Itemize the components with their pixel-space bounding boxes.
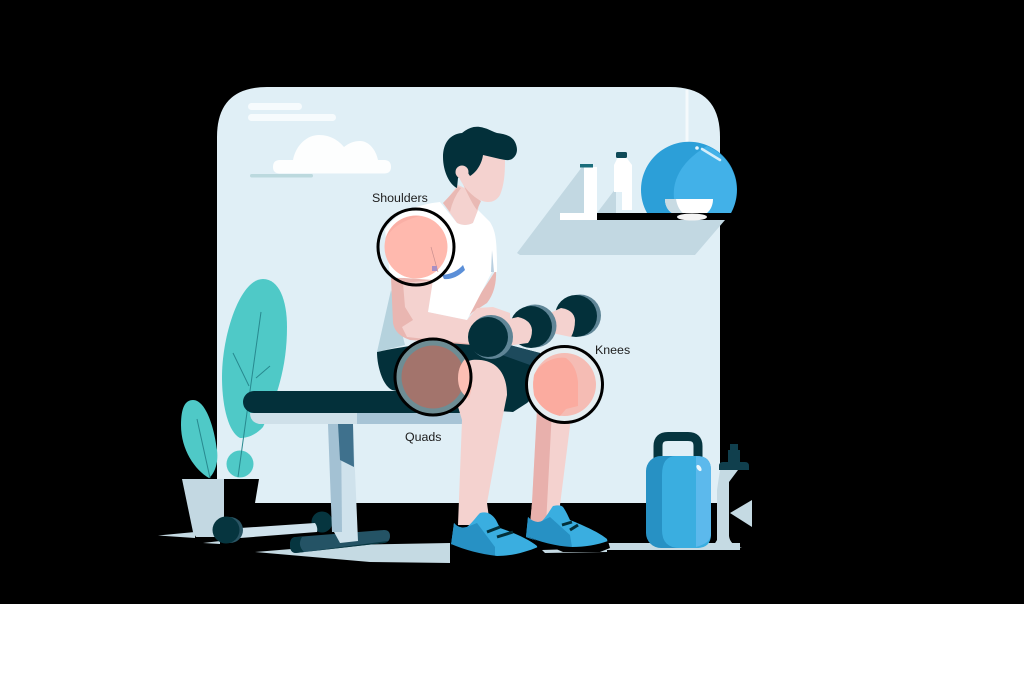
hanging rope	[686, 90, 688, 142]
far arm	[462, 270, 496, 322]
floor dumbbell	[212, 512, 332, 544]
label: Quads: Quads	[405, 430, 442, 444]
ear	[456, 166, 468, 178]
t-shirt	[385, 202, 497, 320]
bench underside	[250, 413, 465, 424]
person	[377, 127, 610, 561]
shelf board	[560, 213, 725, 220]
large leaf	[222, 279, 287, 438]
far handle	[550, 308, 575, 337]
highlight: knees	[526, 346, 602, 422]
face	[458, 150, 505, 202]
near weight	[469, 315, 513, 359]
bench foot	[290, 530, 390, 553]
label: Shoulders: Shoulders	[372, 191, 428, 205]
water bottle	[712, 444, 752, 548]
kettlebell	[646, 436, 711, 548]
back shoe	[526, 505, 610, 552]
bench seat	[243, 391, 483, 413]
hair	[443, 127, 517, 188]
wall panel	[217, 87, 720, 503]
front leg	[455, 360, 507, 525]
small leaf	[181, 400, 217, 478]
bench	[243, 391, 483, 553]
floor shadows	[158, 532, 740, 563]
leaf veins	[197, 312, 270, 478]
round leaf	[226, 450, 254, 478]
bench leg	[328, 424, 358, 543]
highlight: shoulders	[378, 209, 454, 285]
near handle	[505, 317, 532, 346]
back shadow	[377, 290, 405, 352]
icon: bottle 1	[580, 164, 597, 213]
decorative lines	[248, 103, 336, 121]
front shoe	[451, 512, 540, 561]
label: Knees: Knees	[595, 343, 630, 357]
sleeve shade	[491, 250, 494, 272]
pot	[182, 479, 224, 537]
middle weight	[514, 304, 556, 348]
neck	[443, 184, 481, 225]
icon: cloud	[250, 135, 391, 178]
shirt mark	[442, 265, 465, 279]
icon: bottle 2	[614, 152, 632, 210]
highlight: quads	[395, 339, 472, 415]
far weight	[559, 294, 601, 336]
back leg	[530, 410, 572, 525]
upper arm	[391, 278, 512, 345]
icon: exercise ball	[641, 142, 737, 213]
curled dumbbell	[468, 294, 601, 359]
shelf with ball and bottles	[517, 90, 737, 255]
icon: bowl	[665, 199, 713, 215]
plant	[181, 279, 287, 537]
shorts	[377, 340, 552, 412]
